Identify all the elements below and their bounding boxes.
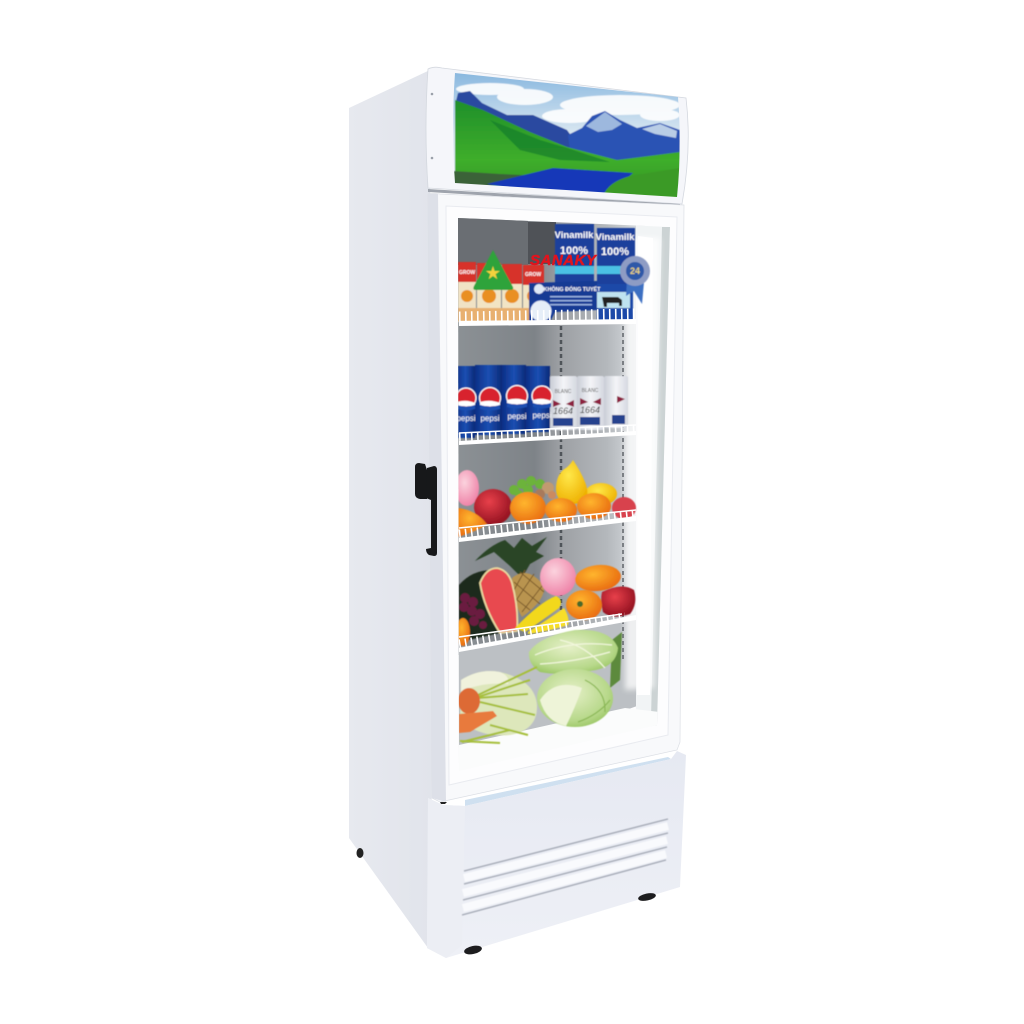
milk cartons: Vinamilk — [596, 232, 635, 243]
sign landscape picture — [450, 70, 685, 200]
glass window with interior — [455, 215, 672, 775]
bananas — [515, 596, 561, 632]
green award sticker: ★ — [485, 263, 501, 283]
cow — [602, 297, 622, 307]
white cans: 1664 — [553, 406, 573, 416]
LED glow — [625, 236, 660, 690]
red bell pepper — [601, 586, 635, 617]
header housing — [426, 67, 688, 204]
red apple — [474, 489, 512, 525]
green award sticker — [473, 250, 513, 290]
lemon — [585, 483, 617, 505]
rear foot — [356, 848, 364, 858]
white cans — [550, 376, 628, 430]
header light box — [426, 67, 688, 207]
dark melon rind — [459, 570, 505, 642]
left orange — [458, 508, 487, 537]
pepsi cans: pepsi — [456, 414, 476, 423]
header shadow line — [428, 189, 680, 207]
white cans: BLANC — [582, 388, 599, 394]
door handle — [415, 463, 437, 556]
pepsi cans: pepsi — [507, 412, 527, 421]
dark top section — [456, 215, 528, 265]
refrigerator base — [427, 751, 686, 958]
green stalks behind cabbage — [610, 632, 622, 688]
lower cabbage — [537, 669, 613, 727]
dark foreground — [454, 170, 523, 186]
back wall — [455, 215, 645, 655]
header screws — [431, 93, 433, 95]
pink peach — [540, 558, 576, 596]
pineapple diamonds — [512, 570, 544, 612]
right shelf rail — [622, 326, 624, 660]
carrots — [458, 688, 480, 714]
door hinge gap strip — [465, 757, 671, 806]
white cans: 1664 — [580, 405, 600, 415]
base housing — [427, 751, 686, 958]
pepsi cans — [456, 365, 552, 438]
white cans: BLANC — [555, 389, 572, 395]
front left foot — [463, 944, 483, 956]
pineapple body — [512, 573, 544, 617]
vent slat highlights — [463, 826, 668, 908]
upper cabbage — [529, 630, 618, 674]
yellow pear — [556, 460, 587, 504]
right mountains — [568, 111, 680, 160]
milk cartons: Vinamilk — [555, 230, 594, 241]
cans on shelf 2 — [456, 365, 628, 438]
fruit on shelf 3 — [455, 460, 636, 537]
small orange — [456, 618, 470, 646]
orange drink boxes: GROW — [525, 272, 541, 278]
LED tube — [637, 236, 650, 695]
tomato — [566, 590, 602, 620]
warranty rosette: 24 — [630, 266, 640, 276]
cabinet side panel — [349, 70, 432, 948]
glass door frame — [428, 194, 684, 802]
orange drink boxes: GROW — [459, 270, 475, 276]
vent slats — [462, 819, 668, 915]
milk cartons: 100% — [601, 246, 629, 258]
door bottom seal — [440, 802, 447, 804]
door inner frame bevel — [446, 206, 677, 785]
glass edge strip — [651, 227, 670, 728]
near meadow — [604, 168, 679, 197]
shelf 4 wire rack — [459, 614, 636, 652]
pink fruit — [612, 497, 636, 519]
illustration: glass door display refrigerator — [349, 66, 689, 958]
lake — [487, 168, 633, 195]
yellow orange pepper — [574, 563, 622, 593]
top shelf products — [458, 224, 650, 323]
shelf 2 wire rack — [459, 425, 636, 445]
milk cartons: 100% — [560, 245, 588, 257]
shelf rails — [560, 326, 562, 620]
oranges — [510, 492, 546, 524]
sky — [453, 73, 680, 172]
left mountains — [456, 90, 570, 148]
orange drink boxes — [458, 262, 544, 322]
shelf 1 wire rack — [459, 315, 636, 326]
green hills — [454, 100, 680, 186]
milk cartons — [555, 224, 635, 320]
blue sticker — [529, 281, 601, 323]
snow caps — [586, 112, 622, 132]
right side wall — [636, 226, 662, 711]
door left stripe — [428, 194, 446, 802]
pepsi cans: pepsi — [480, 414, 500, 423]
clouds — [456, 83, 680, 123]
watermelon slice — [480, 568, 517, 633]
handle grip — [426, 466, 437, 556]
brand text: SANAKY — [530, 252, 598, 269]
lower back wall — [458, 622, 636, 745]
carrot tops — [460, 667, 537, 743]
green grapes — [509, 476, 556, 499]
shelf 3 wire rack — [459, 510, 636, 542]
warranty rosette — [620, 256, 650, 304]
vegetables on floor — [458, 630, 622, 743]
produce on shelf 4 — [456, 537, 635, 646]
dark grapes — [459, 593, 487, 629]
base left corner — [427, 798, 465, 958]
left pale cabbage — [460, 671, 537, 735]
floor — [459, 708, 660, 775]
pepsi cans: pepsi — [532, 411, 552, 420]
peach — [458, 470, 480, 506]
handle back bracket — [415, 463, 427, 499]
pineapple leaves — [475, 537, 547, 578]
front right foot — [637, 892, 657, 902]
blue sticker: KHÔNG ĐÓNG TUYẾT — [544, 285, 601, 293]
